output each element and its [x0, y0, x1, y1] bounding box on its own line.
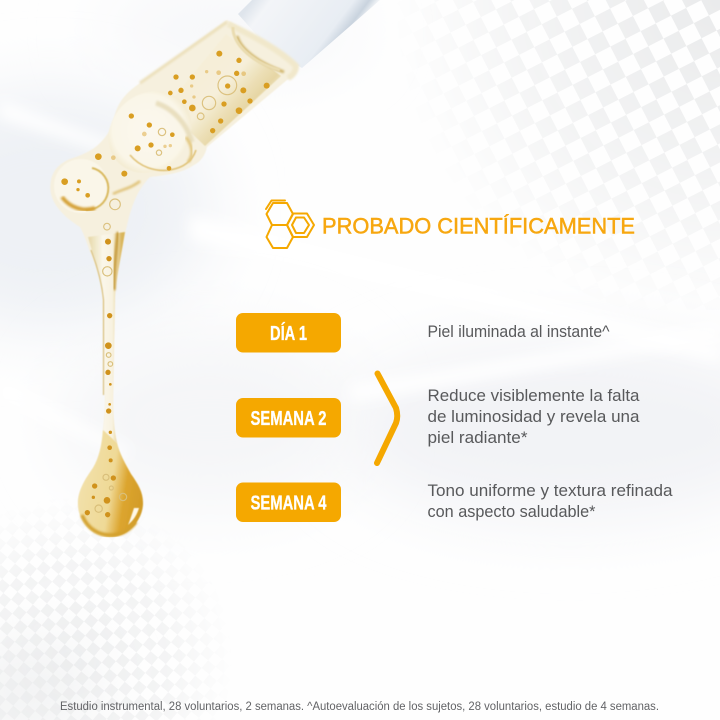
footnote: Estudio instrumental, 28 voluntarios, 2 semanas. ^Autoevaluación de los sujetos, 28 voluntarios, estudio de 4 semanas. [60, 701, 659, 713]
droplet [78, 430, 143, 537]
glass pipette tube [238, 0, 380, 68]
text: semana 2: Reduce visiblemente la falta [428, 387, 640, 405]
arrow: chevron [377, 374, 397, 463]
strand shading [88, 232, 125, 443]
text: semana 4: Tono uniforme y textura refinada [428, 482, 673, 500]
tube liquid [165, 34, 281, 146]
badge: semana 2 [236, 398, 341, 438]
collar [228, 24, 296, 78]
heading: PROBADO CIENTÍFICAMENTE [322, 214, 635, 238]
text: semana 4: con aspecto saludable* [428, 503, 596, 521]
bulb 1 [92, 74, 208, 190]
text: semana 2: piel radiante* [428, 429, 528, 447]
upper edge shading [140, 22, 227, 83]
badge: semana 4 [236, 482, 341, 522]
serum body [50, 20, 297, 537]
text: semana 4 [428, 482, 673, 521]
badge: día 1 [236, 313, 341, 352]
halftone pattern: top right [496, 0, 720, 224]
badge: semana 2: SEMANA 2 [250, 408, 326, 430]
bulb 2 [54, 159, 108, 213]
bubbles upper [61, 51, 270, 261]
text: día 1: Piel iluminada al instante^ [428, 323, 610, 341]
dropper with golden serum [50, 20, 297, 537]
bubbles lower [85, 239, 127, 517]
badge: día 1: DÍA 1 [270, 322, 307, 345]
text: semana 2: de luminosidad y revela una [428, 408, 640, 426]
text: semana 2 [428, 387, 640, 447]
icon: honeycomb hexagons [266, 200, 314, 248]
halftone pattern: bottom left [0, 552, 179, 720]
badge: semana 4: SEMANA 4 [250, 492, 327, 514]
